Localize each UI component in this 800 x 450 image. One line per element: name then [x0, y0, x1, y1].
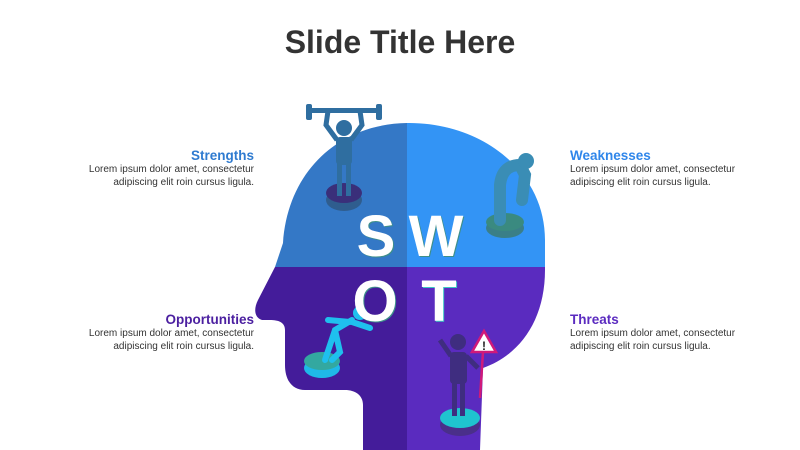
- text: strengths: Lorem ipsum dolor amet, consectetur adipiscing elit roin cursus ligula.: [89, 164, 254, 188]
- icon: warning figure: [440, 331, 496, 436]
- text: opportunities: Lorem ipsum dolor amet, consectetur adipiscing elit roin cursus ligula.: [89, 328, 254, 352]
- head graphic: [255, 104, 545, 450]
- letters SWOT: [352, 204, 465, 335]
- letters SWOT: O: [353, 270, 399, 335]
- text: strengths: [89, 148, 254, 188]
- icon: runner: [304, 306, 370, 378]
- icon: warning figure: !: [482, 339, 486, 353]
- letters SWOT: T: [421, 269, 457, 334]
- letters SWOT: W: [410, 205, 465, 270]
- letters SWOT: S: [357, 204, 395, 269]
- letters SWOT: S: [358, 205, 396, 270]
- letters SWOT: O: [352, 269, 398, 334]
- title: Slide Title Here: [285, 24, 515, 60]
- text: threats: Lorem ipsum dolor amet, consectetur adipiscing elit roin cursus ligula.: [570, 328, 735, 352]
- letters SWOT: W: [409, 204, 464, 269]
- letters SWOT: T: [422, 270, 458, 335]
- text: strengths: Strengths: [191, 148, 254, 163]
- text: opportunities: Opportunities: [166, 312, 254, 327]
- text: weaknesses: Weaknesses: [570, 148, 651, 163]
- text: opportunities: [89, 312, 254, 352]
- icon: tired figure: [486, 153, 534, 238]
- text: threats: [570, 312, 735, 352]
- icon: weightlifter: [306, 104, 382, 211]
- text: weaknesses: Lorem ipsum dolor amet, consectetur adipiscing elit roin cursus ligula.: [570, 164, 735, 188]
- text: threats: Threats: [570, 312, 619, 327]
- text: weaknesses: [570, 148, 735, 188]
